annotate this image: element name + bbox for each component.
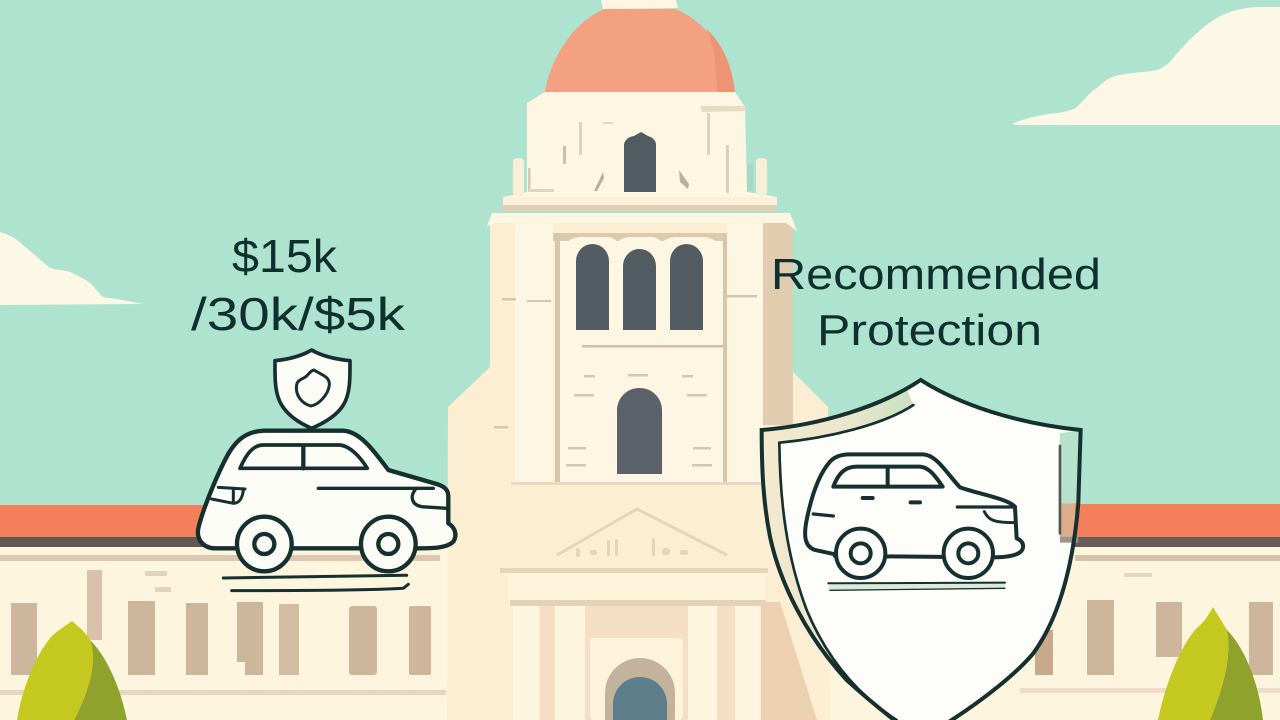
- shield inner band: [762, 389, 913, 720]
- large car: [805, 454, 1023, 590]
- left label: minimum coverage: /30k/$5k: [191, 288, 406, 340]
- icon: small shield: [275, 350, 350, 428]
- main building wing: left and right: [0, 504, 1280, 720]
- tree: right: [1158, 607, 1263, 720]
- cloud: top right: [1012, 7, 1280, 125]
- right label: recommended protection: Recommended: [771, 250, 1101, 299]
- tower triple arched windows: [576, 244, 703, 330]
- wing windows: left: [11, 570, 431, 675]
- dome: [545, 9, 735, 92]
- tower cornice: [487, 197, 797, 231]
- tower lower door window: [617, 388, 662, 474]
- upper drum: [503, 92, 777, 197]
- shield strokes: [762, 380, 1081, 720]
- icon: small car: [198, 431, 455, 591]
- portico: [500, 568, 817, 720]
- tower right shadow: [762, 223, 793, 425]
- tower body: [511, 223, 763, 485]
- dome cap: [601, 0, 678, 9]
- upper drum pillars and marks: [513, 106, 767, 196]
- left label: minimum coverage: [191, 230, 406, 340]
- cloud: left: [0, 232, 142, 305]
- entrance doorway: [590, 638, 683, 720]
- left label: minimum coverage: $15k: [232, 230, 338, 282]
- upper drum window: [624, 132, 656, 192]
- wing windows: right: [1035, 573, 1273, 675]
- shield right translucent strip: [1060, 430, 1080, 543]
- tree: left: [17, 621, 127, 720]
- tower stone dashes: [494, 295, 757, 466]
- central tower base: [447, 223, 830, 720]
- shield body: [762, 380, 1081, 720]
- right label: recommended protection: [771, 250, 1101, 355]
- icon: large shield with car: [762, 380, 1081, 720]
- pediment: [557, 509, 727, 557]
- right label: recommended protection: Protection: [817, 306, 1042, 355]
